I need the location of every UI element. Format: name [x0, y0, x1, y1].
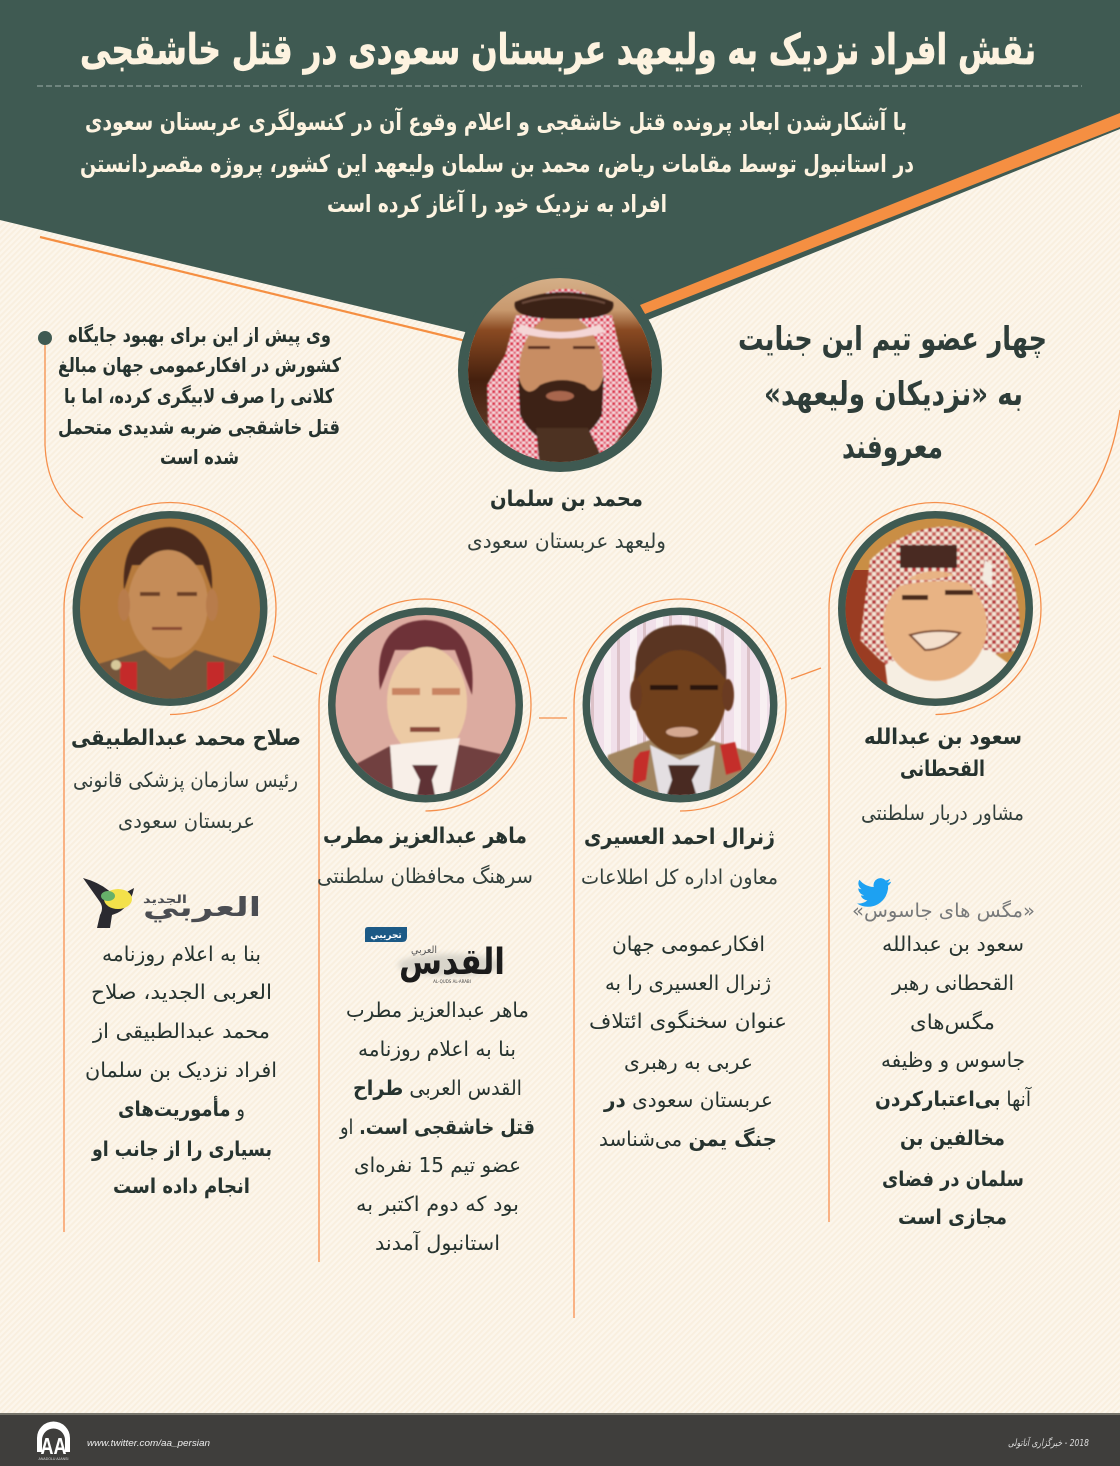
column 1 text	[71, 726, 301, 1198]
column 1 text: و مأموریت‌های	[118, 1095, 245, 1121]
column 2 text: بنا به اعلام روزنامه	[358, 1037, 516, 1061]
column 3 text: ژنرال احمد العسیری	[584, 825, 775, 850]
column 3 text: عنوان سخنگوی ائتلاف	[589, 1009, 787, 1033]
portrait: Salah Tubaigy	[76, 515, 264, 705]
column 4 text: سعود بن عبدالله	[864, 725, 1022, 750]
column 4 text: سعود بن عبدالله	[882, 932, 1024, 956]
left callout text: کلانی را صرف لابیگری کرده، اما با	[64, 384, 334, 408]
column 2 text: قتل خاشقجی است. او	[339, 1115, 535, 1139]
source url: www.twitter.com/aa_persian	[87, 1438, 210, 1449]
logo: Al-Quds Al-Arabi: العربي	[411, 945, 437, 956]
column 2 lines	[319, 599, 567, 1262]
column 3 text	[581, 825, 787, 1151]
column 1 text: محمد عبدالطبیقی از	[92, 1019, 270, 1043]
AA logo: AA	[40, 1433, 66, 1459]
column 4 text: مشاور دربار سلطنتی	[861, 801, 1024, 825]
intro paragraph: افراد به نزدیک خود را آغاز کرده است	[327, 189, 667, 218]
column 4 lines	[829, 503, 1041, 1222]
credit: 2018 - خبرگزاری آناتولی	[1008, 1436, 1089, 1449]
right heading: به «نزدیکان ولیعهد»	[764, 374, 1023, 414]
column 3 text: ژنرال العسیری را به	[605, 971, 771, 995]
column 1 text: افراد نزدیک بن سلمان	[85, 1058, 277, 1082]
intro paragraph: با آشکارشدن ابعاد پرونده قتل خاشقجی و اعلام وقوع آن در کنسولگری عربستان سعودی	[85, 107, 907, 136]
logo: Al-Quds Al-Arabi: تجريبي	[370, 931, 402, 941]
left callout text: وی پیش از این برای بهبود جایگاه	[68, 323, 331, 348]
column 1 text: صلاح محمد عبدالطبیقی	[71, 726, 301, 751]
right heading: معروفند	[842, 427, 943, 467]
logo: Al-Quds Al-Arabi	[365, 927, 505, 984]
column 1 text: انجام داده است	[113, 1174, 250, 1198]
column 4 text: مخالفین بن	[900, 1126, 1005, 1150]
column 1 lines	[64, 503, 317, 1232]
icon: twitter bird	[857, 878, 891, 907]
column 3 text: معاون اداره کل اطلاعات	[581, 865, 778, 889]
column 1 text: عربستان سعودی	[118, 809, 255, 833]
column 3 text: جنگ یمن می‌شناسد	[599, 1127, 777, 1151]
AA logo: ANADOLU AJANSI	[39, 1457, 68, 1461]
intro paragraph: در استانبول توسط مقامات ریاض، محمد بن سلمان ولیعهد این کشور، پروژه مقصردانستن	[80, 150, 914, 178]
column 4 text: سلمان در فضای	[882, 1167, 1024, 1191]
column 4 text: «مگس های جاسوس»	[852, 899, 1035, 922]
column 2 text: عضو تیم 15 نفره‌ای	[354, 1153, 521, 1177]
left callout text: قتل خاشقجی ضربه شدیدی متحمل	[58, 415, 340, 439]
column 3 text: عربی به رهبری	[624, 1050, 753, 1074]
right heading	[738, 319, 1047, 467]
column 1 text: رئیس سازمان پزشکی قانونی	[73, 768, 298, 792]
logo: Al-Quds Al-Arabi: القدس	[399, 941, 505, 983]
name: Mohammed bin Salman: ولیعهد عربستان سعودی	[467, 529, 666, 553]
column 1 text: العربی الجدید، صلاح	[91, 980, 272, 1004]
header panel	[0, 0, 1120, 360]
column 2 text: استانبول آمدند	[375, 1230, 500, 1255]
name: Mohammed bin Salman: محمد بن سلمان	[490, 487, 643, 512]
left callout text	[58, 323, 341, 469]
logo: Al-Araby Al-Jadeed: العربي	[143, 893, 261, 923]
name: Mohammed bin Salman	[467, 487, 666, 553]
left connector with dot	[38, 331, 83, 518]
footer bar	[0, 1413, 1120, 1466]
portrait: Saud al-Qahtani	[842, 515, 1029, 705]
column 3 lines	[574, 599, 821, 1318]
logo: Al-Quds Al-Arabi: AL-QUDS AL-ARABI	[433, 979, 471, 984]
portrait: Maher Mutreb	[332, 612, 520, 800]
column 1 text: بنا به اعلام روزنامه	[102, 942, 261, 966]
column 2 text	[317, 824, 535, 1255]
column 4 text	[852, 725, 1035, 1229]
thin orange diagonal line	[40, 237, 466, 341]
portrait: Ahmed Asiri	[586, 612, 774, 800]
orange diagonal band	[640, 113, 1120, 314]
left callout text: کشورش در افکارعمومی جهان مبالغ	[58, 353, 341, 377]
column 2 text: ماهر عبدالعزیز مطرب	[346, 998, 529, 1022]
intro paragraph	[80, 107, 914, 218]
column 4 text: مگس‌های	[910, 1010, 995, 1034]
logo: Al-Araby Al-Jadeed: الجديد	[143, 893, 187, 906]
column 2 text: بود که دوم اکتبر به	[356, 1192, 519, 1216]
column 2 text: القدس العربی طراح	[353, 1076, 522, 1100]
column 2 text: ماهر عبدالعزیز مطرب	[323, 824, 527, 849]
column 4 text: القحطانی	[900, 757, 985, 782]
column 3 text: عربستان سعودی در	[603, 1088, 773, 1112]
AA logo	[37, 1422, 70, 1461]
portrait: Mohammed bin Salman	[460, 270, 660, 470]
column 4 text: جاسوس و وظیفه	[881, 1048, 1025, 1072]
logo: Al-Araby Al-Jadeed	[83, 878, 261, 928]
column 4 text: آنها بی‌اعتبارکردن	[875, 1086, 1032, 1111]
column 4 text: مجازی است	[898, 1205, 1007, 1229]
column 4 text: القحطانی رهبر	[891, 971, 1014, 995]
right connector	[1035, 410, 1120, 545]
column 2 text: سرهنگ محافظان سلطنتی	[317, 864, 533, 888]
column 3 text: افکارعمومی جهان	[612, 932, 765, 956]
left callout text: شده است	[160, 445, 239, 469]
column 1 text: بسیاری را از جانب او	[91, 1137, 272, 1161]
